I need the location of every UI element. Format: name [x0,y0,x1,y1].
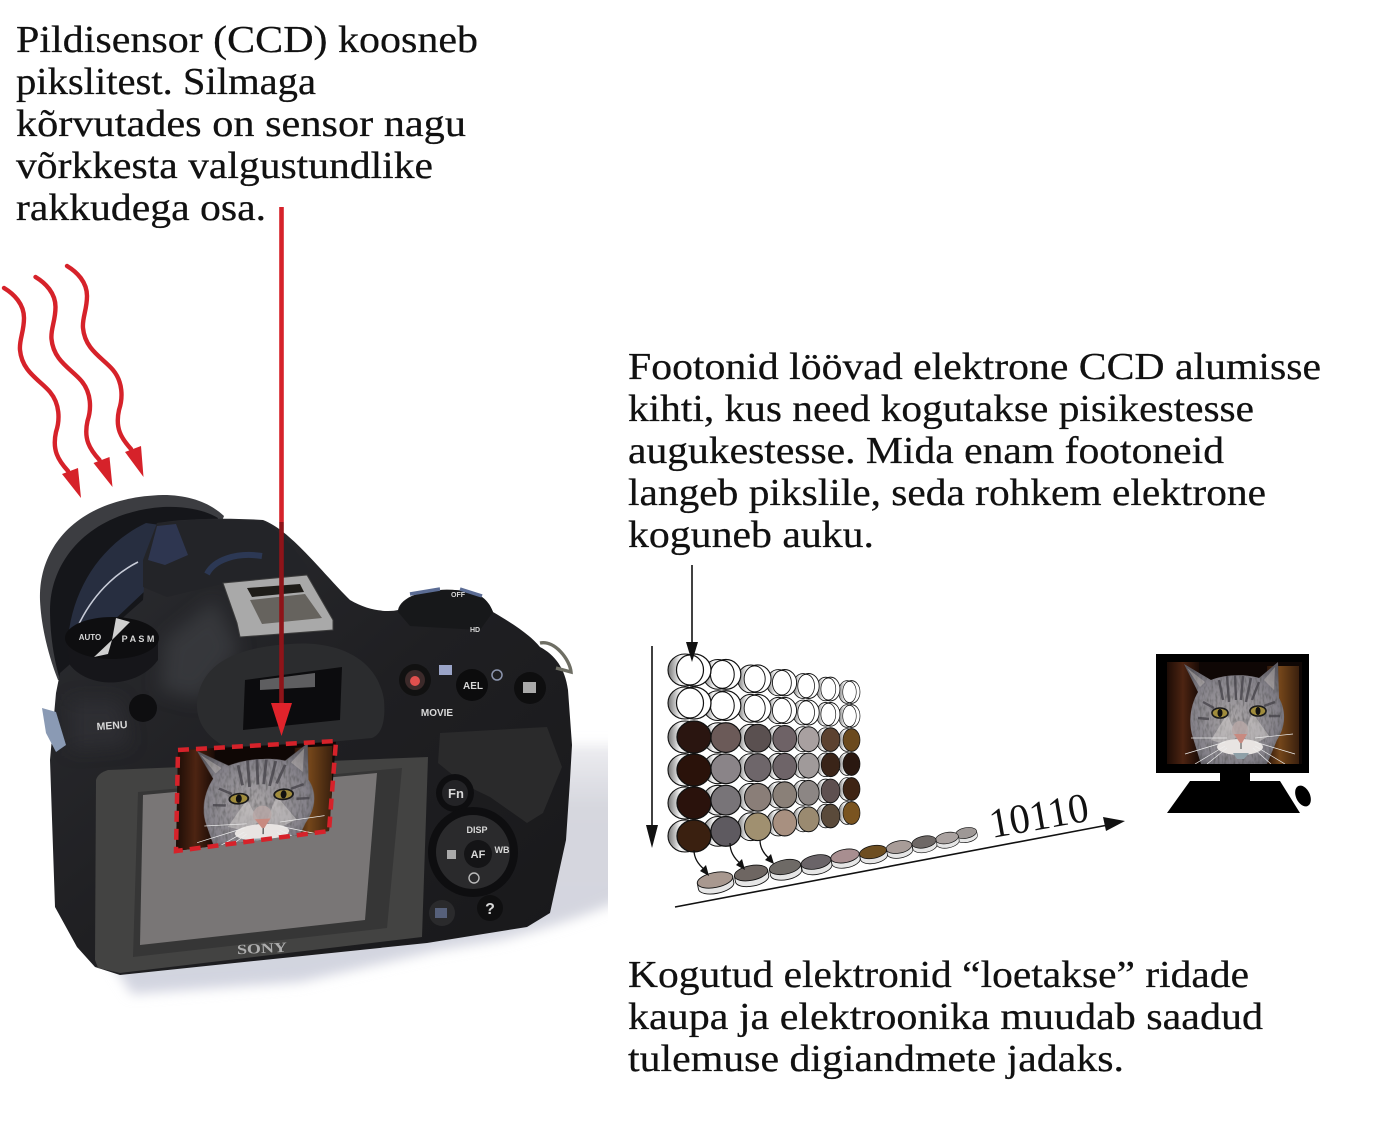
mode dial [65,617,159,682]
Fn button [436,774,474,812]
icon: computer monitor with cat [1156,654,1314,813]
control pad [428,807,518,897]
text block: sensor description: kõrvutades on sensor nagu [16,103,466,145]
text block: sensor description: rakkudega osa. [16,187,266,229]
screen bezel [95,757,428,973]
text block: photons: kihti, kus need kogutakse pisikestesse [628,388,1254,430]
mode dial: AUTO [79,633,101,642]
camera body [50,519,572,975]
monitor frame [1156,654,1309,773]
menu button [96,694,157,733]
text block: sensor description: pikslitest. Silmaga [16,61,316,103]
text block: readout: kaupa ja elektroonika muudab saadud [628,996,1263,1038]
text block: sensor description: Pildisensor (CCD) koosneb [16,19,478,61]
text block: photons: langeb pikslile, seda rohkem elektrone [628,472,1266,514]
screen frame [133,768,402,957]
text block: photons: Footonid löövad elektrone CCD alumisse [628,346,1321,388]
Fn button: Fn [448,786,464,801]
arrow: photons to pixels [686,565,698,662]
text block: readout: Kogutud elektronid “loetakse” ridade [628,954,1249,996]
AEL button: AEL [463,681,483,692]
text block: photons: koguneb auku. [628,514,874,556]
curved readout arrows [694,840,774,876]
text block: photons [628,346,1321,556]
text block: sensor description [16,19,478,229]
display button [514,672,546,704]
grey screen [140,773,377,945]
readout disks [696,826,978,897]
AEL button [439,665,502,701]
lens [40,495,224,690]
monitor stand [1220,773,1250,782]
text block: sensor description: võrkkesta valgustundlike [16,145,433,187]
movie button: MOVIE [421,708,453,719]
text block: readout: tulemuse digiandmete jadaks. [628,1038,1124,1080]
cat picture on the sensor [176,741,336,854]
mouse [1292,783,1314,809]
flash prism [143,519,310,597]
pixel well grid [668,654,860,852]
binary label: 10110 [986,785,1092,848]
keyboard [1167,781,1300,813]
top-right control dial: HD [470,627,480,634]
playback button [429,900,455,926]
movie button [399,664,453,719]
help button [477,895,503,921]
text block: readout [628,954,1263,1080]
eyecup and viewfinder [197,643,384,750]
text block: photons: augukestesse. Mida enam footoneid [628,430,1224,472]
monitor image [1167,662,1302,764]
camera shadow [110,745,625,994]
arrow: data stream [675,817,1125,907]
mode dial: P A S M [122,634,154,644]
strap ring [540,643,571,672]
menu button: MENU [96,719,128,733]
camera photo illustration [40,495,625,994]
red arrow to sensor [271,207,292,736]
shoulder highlights [70,600,240,750]
help button: ? [485,901,495,918]
brand text: SONY [237,941,287,958]
top-right control dial [398,589,493,634]
control pad: WB [494,845,510,855]
left lug [42,708,66,752]
arrow: readout direction [646,646,658,848]
control pad: DISP [466,825,488,835]
icon: wavy red light rays [4,266,144,498]
dashed red frame [176,741,336,851]
hot shoe [223,575,333,637]
handgrip [438,727,562,823]
control pad: AF [471,849,486,861]
top-right control dial: OFF [451,592,466,599]
